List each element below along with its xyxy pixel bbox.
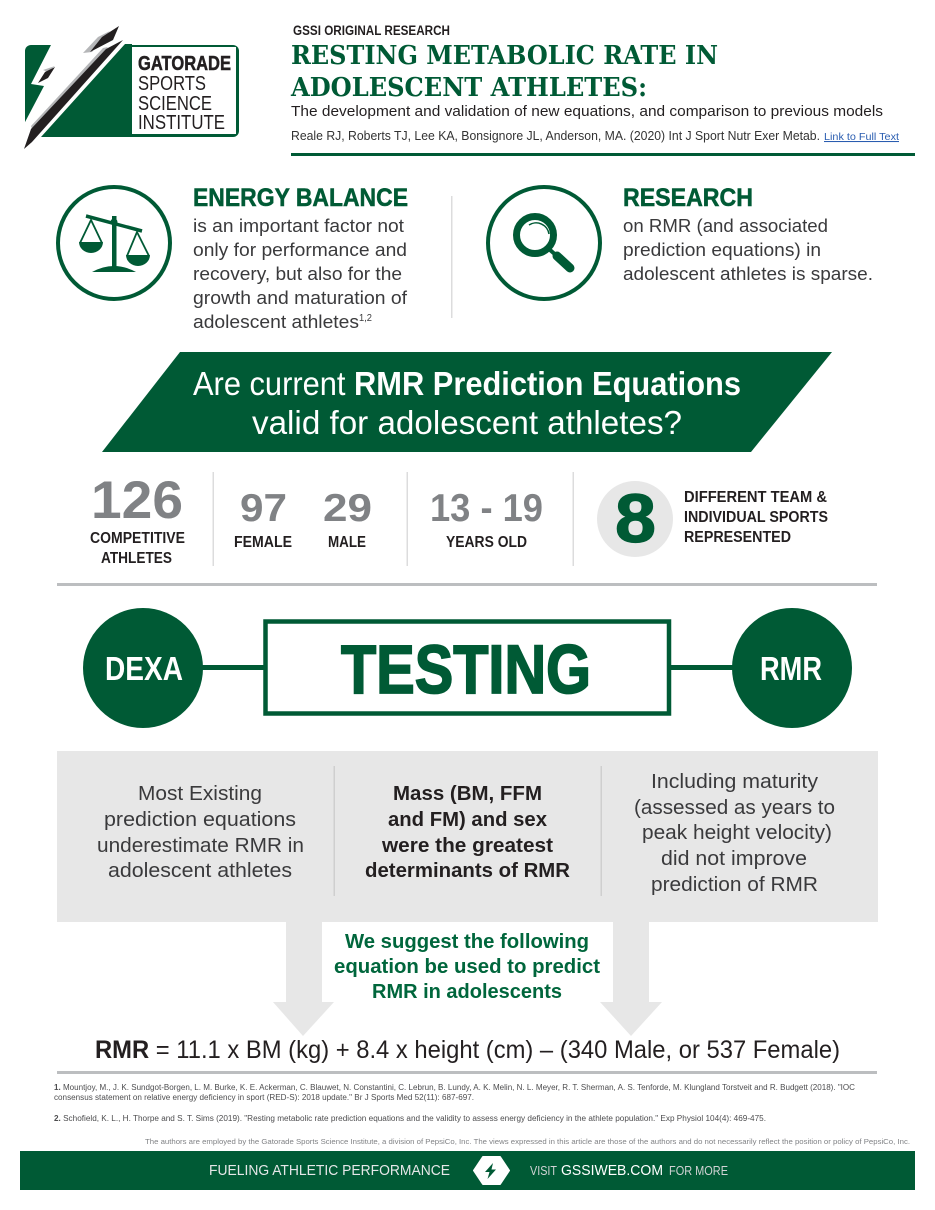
icon: balance scale <box>58 187 170 299</box>
finding 3 <box>634 771 835 896</box>
testing box: TESTING <box>341 631 591 708</box>
body text: adolescent athletes <box>193 311 359 332</box>
subtitle: The development and validation of new equations, and comparison to previous models <box>291 103 883 120</box>
footer bar <box>20 1151 915 1190</box>
finding 1: prediction equations <box>104 809 296 831</box>
logo: Gatorade Sports Science Institute: GATORADE <box>138 53 231 75</box>
website call to action: VISIT <box>530 1164 557 1178</box>
callout: suggested equation intro <box>334 931 600 1003</box>
finding 3: peak height velocity) <box>642 822 832 844</box>
callout: suggested equation intro: equation be used to predict <box>334 956 600 978</box>
body text: recovery, but also for the <box>193 263 402 284</box>
logo: Gatorade Sports Science Institute: INSTITUTE <box>138 112 225 134</box>
finding 1: Most Existing <box>138 783 262 805</box>
eyebrow label: GSSI ORIGINAL RESEARCH <box>293 23 450 38</box>
stat: 29 male: 29 <box>323 487 372 530</box>
banner: research question: Are current RMR Prediction Equations <box>193 365 741 402</box>
stat: 8 sports: REPRESENTED <box>684 529 791 546</box>
stat: 13-19 years old <box>430 487 543 551</box>
stat: 13-19 years old: YEARS OLD <box>446 534 527 551</box>
arrow: left <box>273 920 334 1036</box>
stat: 126 competitive athletes <box>90 471 185 567</box>
finding 1: underestimate RMR in <box>97 835 304 857</box>
disclaimer: The authors are employed by the Gatorade Sports Science Institute, a division of PepsiCo, Inc. The views expressed in this article are those of the authors and do not necessarily reflect the position or policy of PepsiCo, Inc. <box>145 1137 910 1146</box>
stat: 29 male <box>323 487 372 551</box>
body text: is an important factor not <box>193 215 404 236</box>
body text: growth and maturation of <box>193 287 408 308</box>
stat: 29 male: MALE <box>328 534 366 551</box>
DEXA circle <box>83 608 203 728</box>
panel: research <box>488 184 873 299</box>
finding 2 <box>365 783 571 882</box>
logo: Gatorade Sports Science Institute: SPORTS <box>138 73 206 95</box>
finding 3: prediction of RMR <box>651 874 818 896</box>
body text: on RMR (and associated <box>623 215 828 236</box>
panel: energy balance <box>58 184 408 332</box>
banner: research question: valid for adolescent athletes? <box>252 404 682 441</box>
panel: findings <box>57 751 878 922</box>
tagline: FUELING ATHLETIC PERFORMANCE <box>209 1162 450 1179</box>
finding 3: (assessed as years to <box>634 797 835 819</box>
icon: magnifying glass <box>488 187 600 299</box>
header: study title block <box>290 23 899 143</box>
stat: 8 sports: DIFFERENT TEAM & <box>684 489 827 506</box>
body text <box>623 215 873 284</box>
logo: Gatorade Sports Science Institute: SCIENCE <box>138 93 212 115</box>
finding 1: adolescent athletes <box>108 860 292 882</box>
DEXA circle: DEXA <box>105 650 183 687</box>
body text <box>193 215 408 332</box>
stat: 97 female <box>234 487 292 551</box>
finding 3: did not improve <box>661 848 807 870</box>
body text: only for performance and <box>193 239 407 260</box>
callout: suggested equation intro: RMR in adolescents <box>372 981 562 1003</box>
references <box>54 1083 855 1123</box>
finding 1 <box>97 783 304 882</box>
finding 2: determinants of RMR <box>365 860 571 882</box>
references: 2. Schofield, K. L., H. Thorpe and S. T. Sims (2019). "Resting metabolic rate prediction equations and the validity to assess energy deficiency in the athlete population." Exp Physiol 104(4): 469-475. <box>54 1114 766 1123</box>
stat: 8 sports: INDIVIDUAL SPORTS <box>684 509 828 526</box>
callout: suggested equation intro: We suggest the following <box>345 931 589 953</box>
website call to action: GSSIWEB.COM <box>561 1162 663 1179</box>
banner: research question <box>102 352 832 452</box>
RMR circle <box>732 608 852 728</box>
stat: 13-19 years old: 13 - 19 <box>430 487 543 530</box>
finding 2: were the greatest <box>381 835 553 857</box>
website call to action <box>530 1162 728 1179</box>
finding 2: and FM) and sex <box>388 809 547 831</box>
heading: ENERGY BALANCE <box>193 184 408 212</box>
stat: 8 sports: 8 <box>615 480 656 557</box>
references: consensus statement on relative energy deficiency in sport (RED-S): 2018 update." Br J Sports Med 52(11): 687-697. <box>54 1093 474 1102</box>
title <box>290 40 718 103</box>
stats row <box>90 471 828 567</box>
title: ADOLESCENT ATHLETES: <box>290 72 647 103</box>
icon: hexagon bolt <box>474 1157 509 1184</box>
stat: 126 competitive athletes: 126 <box>91 471 183 530</box>
body text: adolescent athletes is sparse. <box>623 263 873 284</box>
citation: Reale RJ, Roberts TJ, Lee KA, Bonsignore JL, Anderson, MA. (2020) Int J Sport Nutr Exer Metab. <box>291 129 820 143</box>
stat: 97 female: 97 <box>240 487 287 530</box>
arrow: right <box>600 920 662 1036</box>
heading: RESEARCH <box>623 184 753 212</box>
website call to action: FOR MORE <box>669 1164 728 1178</box>
stat: 126 competitive athletes: COMPETITIVE <box>90 530 185 547</box>
finding 3: Including maturity <box>651 771 818 793</box>
stat: 126 competitive athletes: ATHLETES <box>101 550 172 567</box>
title: RESTING METABOLIC RATE IN <box>291 40 718 71</box>
testing box <box>266 622 669 714</box>
RMR circle: RMR <box>760 650 822 687</box>
testing diagram <box>83 608 852 728</box>
references: 1. Mountjoy, M., J. K. Sundgot-Borgen, L. M. Burke, K. E. Ackerman, C. Blauwet, N. Constantini, C. Lebrun, B. Lundy, A. K. Melin, N. L. Meyer, R. T. Sherman, A. S. Tenforde, M. Klungland Torstveit and R. Budgett (2018). "IOC <box>54 1083 855 1092</box>
logo: Gatorade Sports Science Institute <box>24 26 239 149</box>
equation: RMR = 11.1 x BM (kg) + 8.4 x height (cm) – (340 Male, or 537 Female) <box>95 1036 840 1064</box>
link to full text: Link to Full Text <box>824 131 899 143</box>
body text: prediction equations) in <box>623 239 821 260</box>
body text: 1,2 <box>359 312 372 324</box>
finding 2: Mass (BM, FFM <box>393 783 542 805</box>
stat: 97 female: FEMALE <box>234 534 292 551</box>
stat: 8 sports <box>597 480 828 557</box>
